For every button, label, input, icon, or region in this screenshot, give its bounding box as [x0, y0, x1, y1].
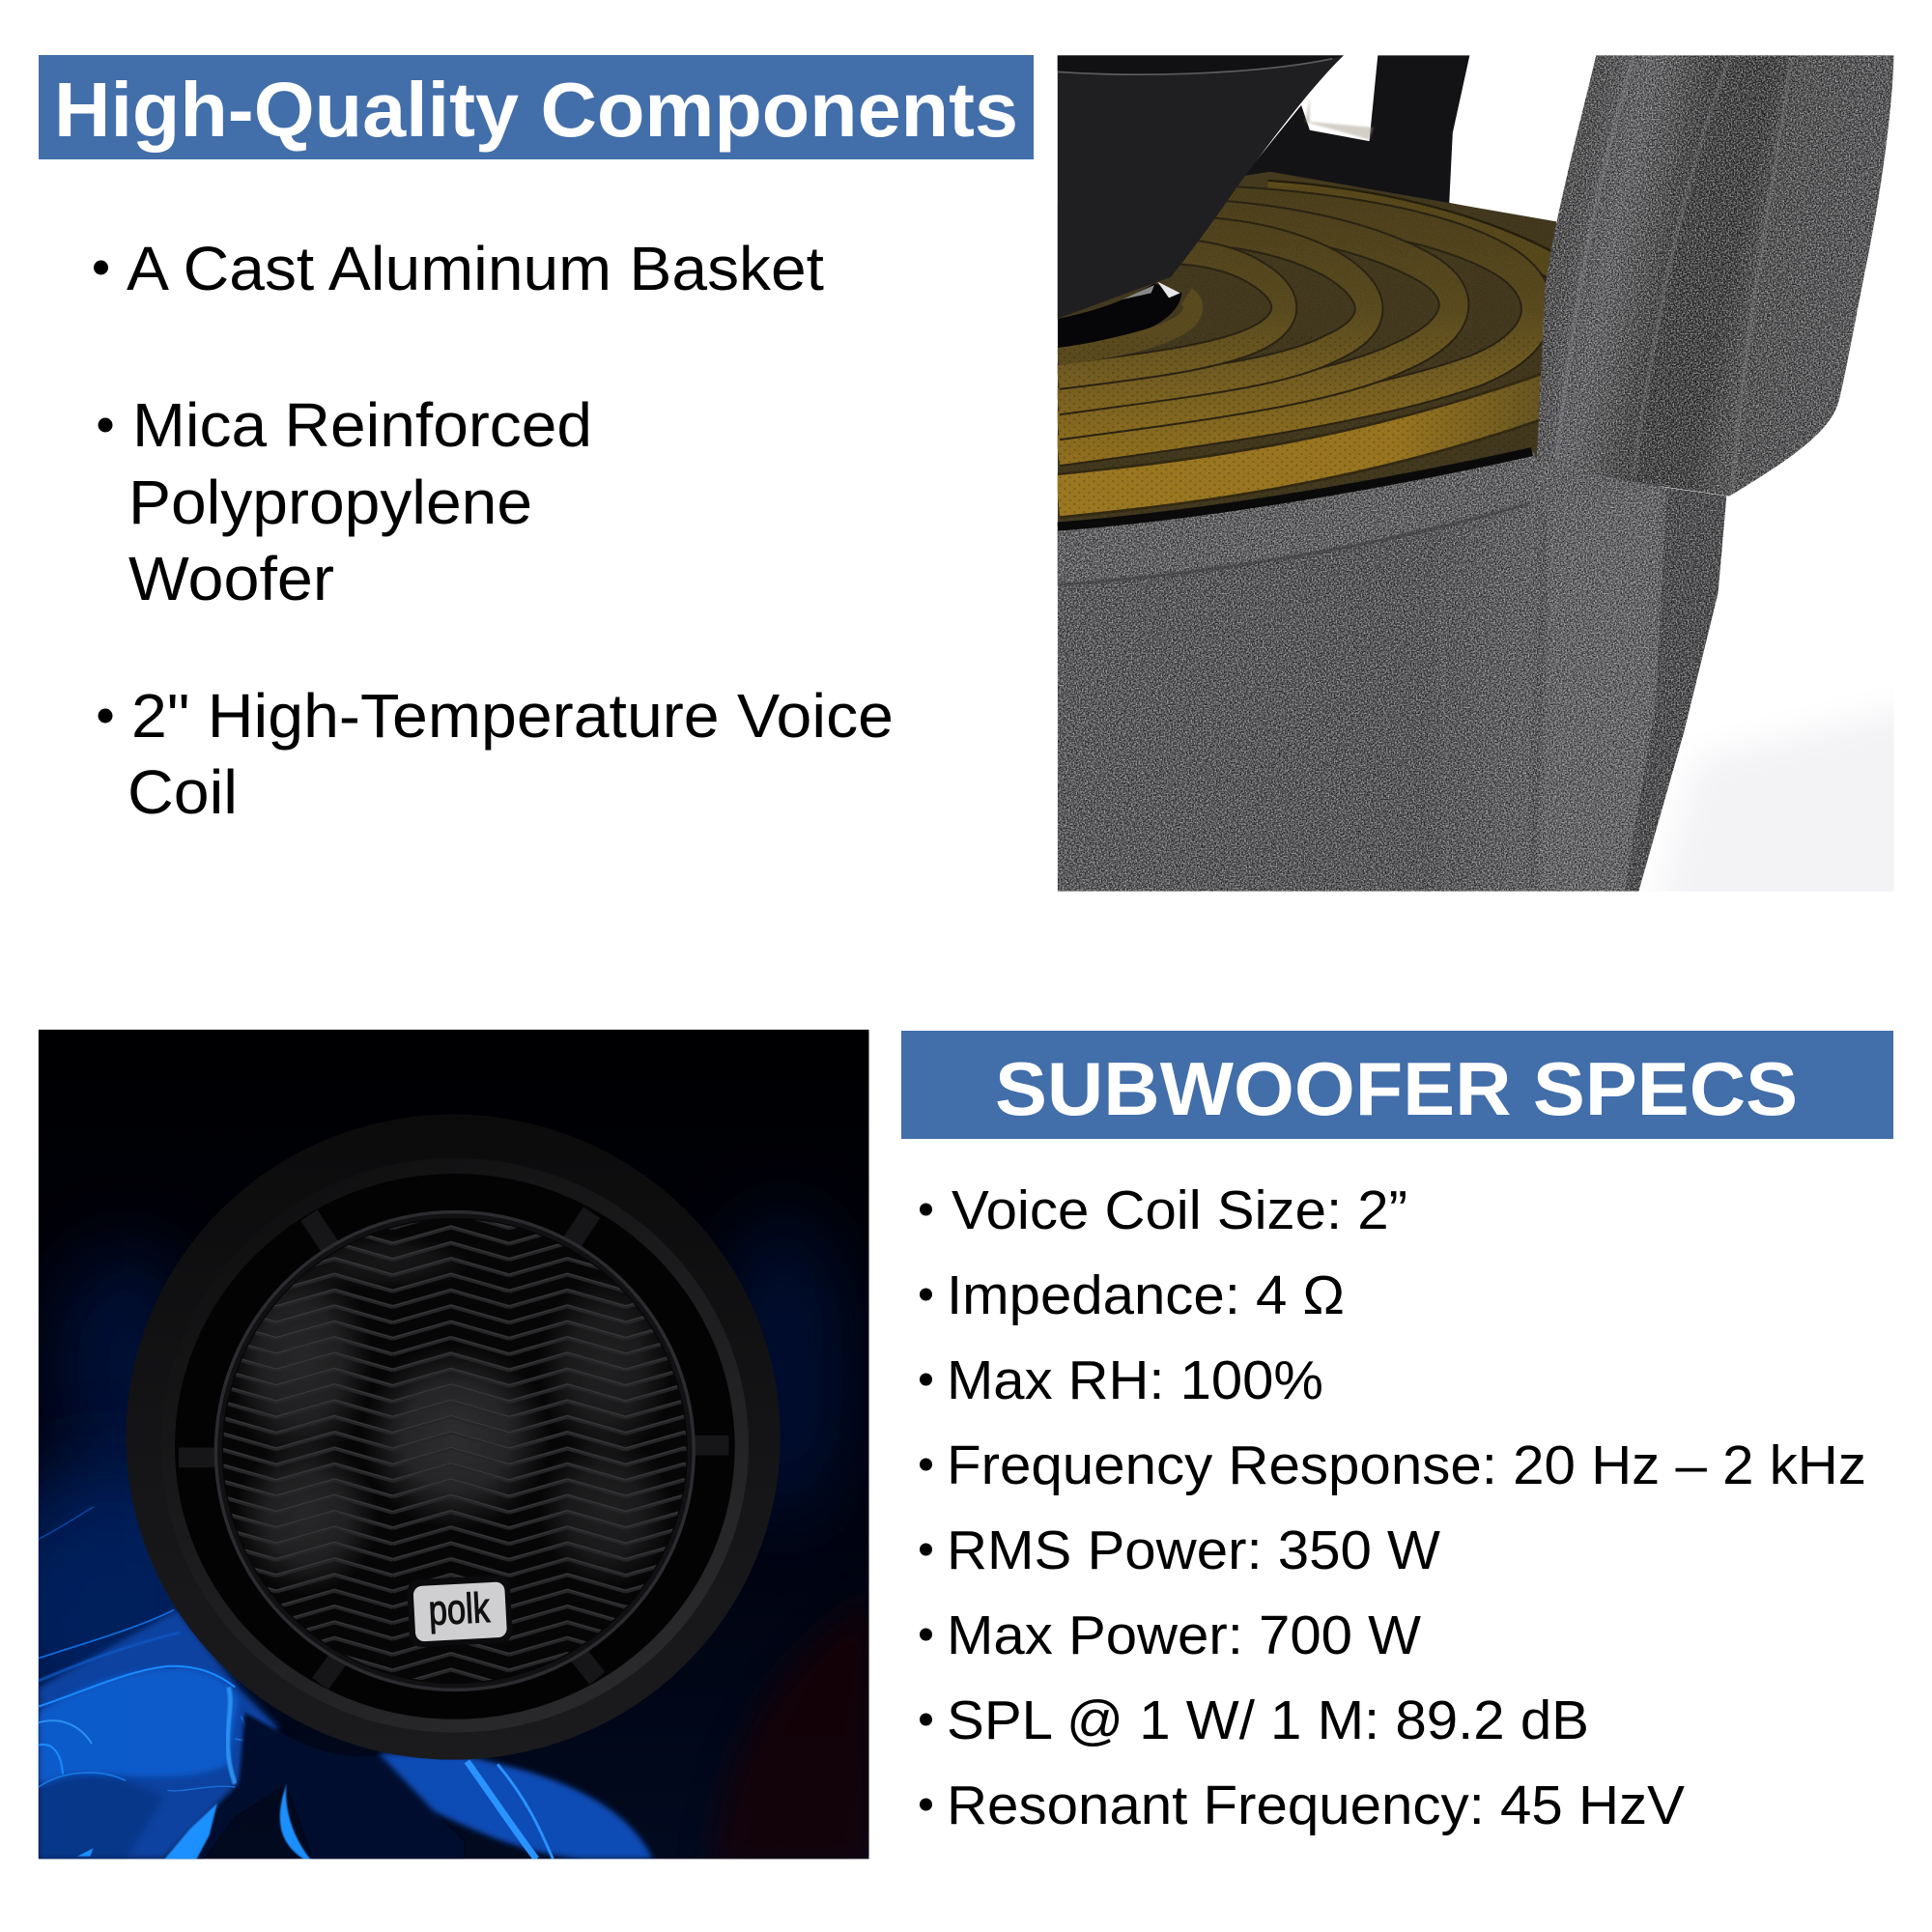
bullet: 2" High-Temperature Voice Coil [99, 681, 894, 827]
surround rolls [1057, 172, 1557, 554]
panel: high-quality components text [39, 55, 1034, 827]
spec: SPL: SPL @ 1 W/ 1 M: 89.2 dB [947, 1690, 1589, 1751]
spec: max power: Max Power: 700 W [947, 1605, 1421, 1666]
spec: max RH: Max RH: 100% [947, 1350, 1323, 1411]
bullet: 2" High-Temperature Voice Coil: 2" High-Temperature Voice [131, 681, 894, 751]
photo: close-up of cast aluminum basket and surround [1057, 55, 1893, 892]
black cone [1058, 55, 1344, 319]
bullet: Mica Reinforced Polypropylene Woofer: Mica Reinforced [132, 390, 592, 460]
basket pillar [1537, 55, 1893, 497]
spokes [179, 1212, 728, 1684]
spec: frequency response: Frequency Response: 20 Hz – 2 kHz [947, 1435, 1866, 1496]
heading banner: SUBWOOFER SPECS: SUBWOOFER SPECS [995, 1046, 1798, 1131]
polk badge [407, 1575, 513, 1648]
left blue smoke [39, 1507, 464, 1860]
polk badge: polk [428, 1585, 491, 1634]
spec: voice coil size: Voice Coil Size: 2” [952, 1179, 1407, 1241]
grille [216, 1212, 694, 1690]
spec: RMS power: RMS Power: 350 W [947, 1520, 1440, 1581]
panel: subwoofer specs [901, 1031, 1893, 1836]
bullet: A Cast Aluminum Basket: A Cast Aluminum Basket [127, 234, 824, 303]
bullet: 2" High-Temperature Voice Coil: Coil [128, 757, 238, 827]
bullet: Mica Reinforced Polypropylene Woofer: Polypropylene [128, 468, 532, 537]
speaker outer rim [126, 1115, 781, 1760]
photo: Polk subwoofer with blue smoke background [0, 1030, 877, 1872]
bullet: Mica Reinforced Polypropylene Woofer: Woofer [128, 544, 334, 613]
bullet: Mica Reinforced Polypropylene Woofer [99, 390, 592, 613]
heading banner: SUBWOOFER SPECS [901, 1031, 1893, 1139]
speaker recess [175, 1174, 735, 1719]
heading banner: High-Quality Components: High-Quality Components [54, 67, 1018, 153]
background smoke haze [0, 1212, 877, 1872]
basket body [1058, 449, 1738, 893]
centre blue smoke [379, 1753, 653, 1859]
back frame [1245, 55, 1470, 207]
glossy dark voice-coil edge [1058, 282, 1181, 348]
spec: resonant frequency: Resonant Frequency: 45 HzV [947, 1775, 1685, 1836]
spec: impedance: Impedance: 4 Ω [947, 1264, 1345, 1326]
